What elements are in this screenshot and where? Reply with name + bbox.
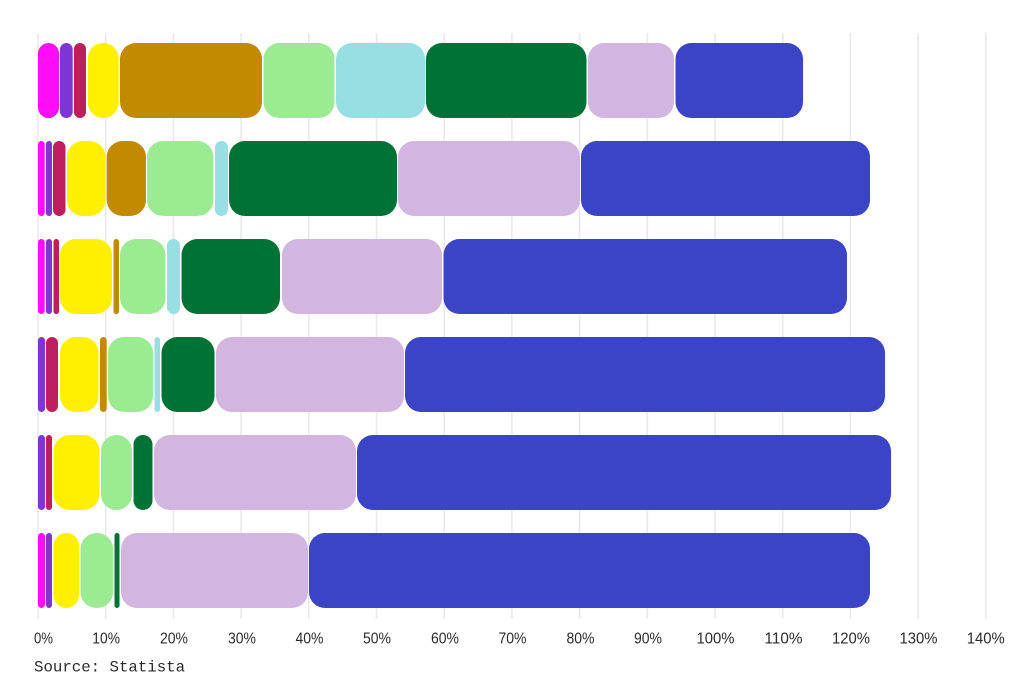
source note: Source: Statista	[34, 658, 185, 676]
x-axis labels: 90%	[634, 630, 662, 648]
x-axis labels: 60%	[431, 630, 459, 648]
bar row 5	[38, 435, 891, 510]
bar row 4	[38, 337, 885, 412]
x-axis labels: 80%	[566, 630, 594, 648]
x-axis labels: 100%	[696, 630, 734, 648]
x-axis labels: 70%	[498, 630, 526, 648]
x-axis labels: 10%	[92, 630, 120, 648]
x-axis labels: 30%	[228, 630, 256, 648]
bar row 2	[38, 141, 870, 216]
x-axis labels: 20%	[160, 630, 188, 648]
bar row 3	[38, 239, 847, 314]
bar row 1	[38, 43, 803, 118]
x-axis labels	[34, 630, 1005, 648]
x-axis labels: 0%	[34, 630, 53, 648]
x-axis labels: 110%	[764, 630, 802, 648]
bar row 6	[38, 533, 870, 608]
x-axis labels: 140%	[967, 630, 1005, 648]
x-axis labels: 40%	[296, 630, 324, 648]
x-axis labels: 50%	[363, 630, 391, 648]
x-axis labels: 130%	[900, 630, 938, 648]
x-axis labels: 120%	[832, 630, 870, 648]
